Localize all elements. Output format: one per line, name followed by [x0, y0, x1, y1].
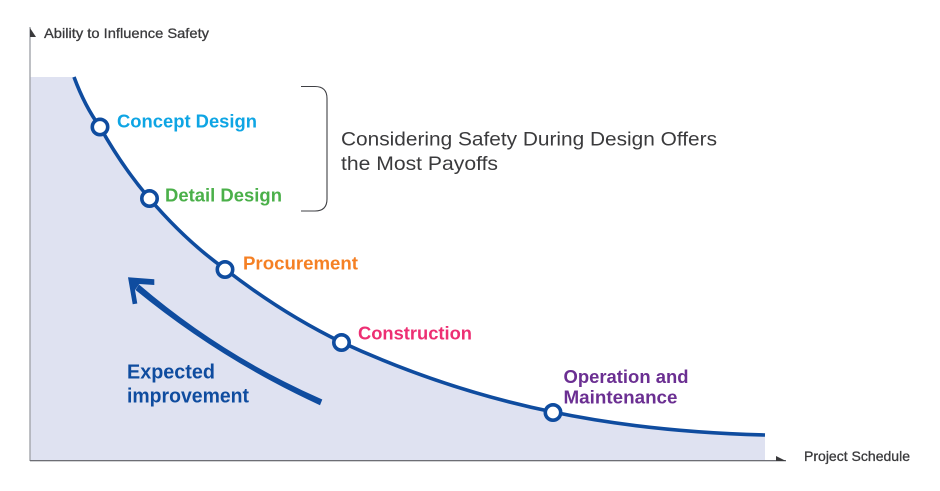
marker: concept design	[92, 119, 108, 135]
vertical axis	[29, 27, 36, 461]
label: operation and maintenance: Maintenance	[564, 386, 678, 408]
callout text: the Most Payoffs	[341, 153, 498, 175]
label: concept design: Concept Design	[117, 110, 257, 132]
label: operation and maintenance: Operation and	[564, 366, 688, 387]
arrow: expected improvement	[128, 277, 322, 405]
callout text	[341, 128, 717, 175]
y axis label: Ability to Influence Safety	[44, 25, 209, 41]
shaded area under curve	[30, 77, 765, 460]
label: procurement: Procurement	[243, 252, 358, 274]
x axis label: Project Schedule	[804, 448, 910, 464]
label: detail design: Detail Design	[165, 184, 282, 206]
callout text: Considering Safety During Design Offers	[341, 128, 717, 150]
marker: detail design	[142, 191, 157, 206]
safety curve	[74, 77, 765, 435]
label: expected improvement: Expected	[127, 362, 215, 384]
label: expected improvement: improvement	[127, 386, 249, 408]
label: operation and maintenance	[564, 366, 688, 408]
marker: operation and maintenance	[545, 405, 561, 420]
bracket	[301, 86, 327, 211]
marker: procurement	[217, 262, 233, 277]
label: expected improvement	[127, 362, 249, 408]
marker: construction	[334, 335, 349, 350]
label: construction: Construction	[358, 322, 472, 344]
horizontal axis	[30, 456, 786, 461]
